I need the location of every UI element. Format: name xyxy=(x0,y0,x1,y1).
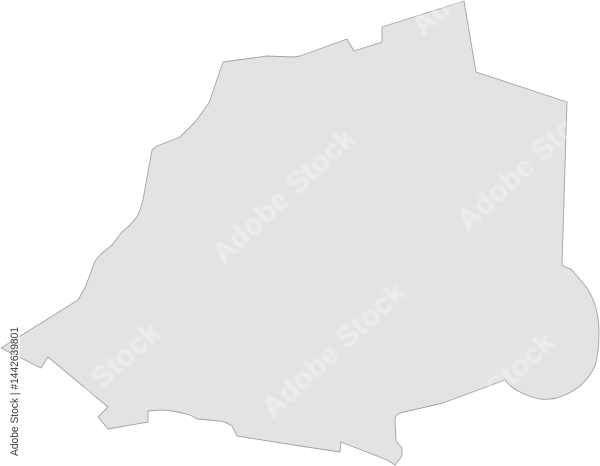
watermarks: Adobe Stock xyxy=(10,315,167,465)
image id caption: Adobe Stock | #1442639801 xyxy=(9,327,21,456)
watermarks: Adobe Stock xyxy=(205,121,362,271)
watermarks: Adobe Stock xyxy=(255,275,412,425)
watermarks: Adobe Stock xyxy=(50,70,207,220)
